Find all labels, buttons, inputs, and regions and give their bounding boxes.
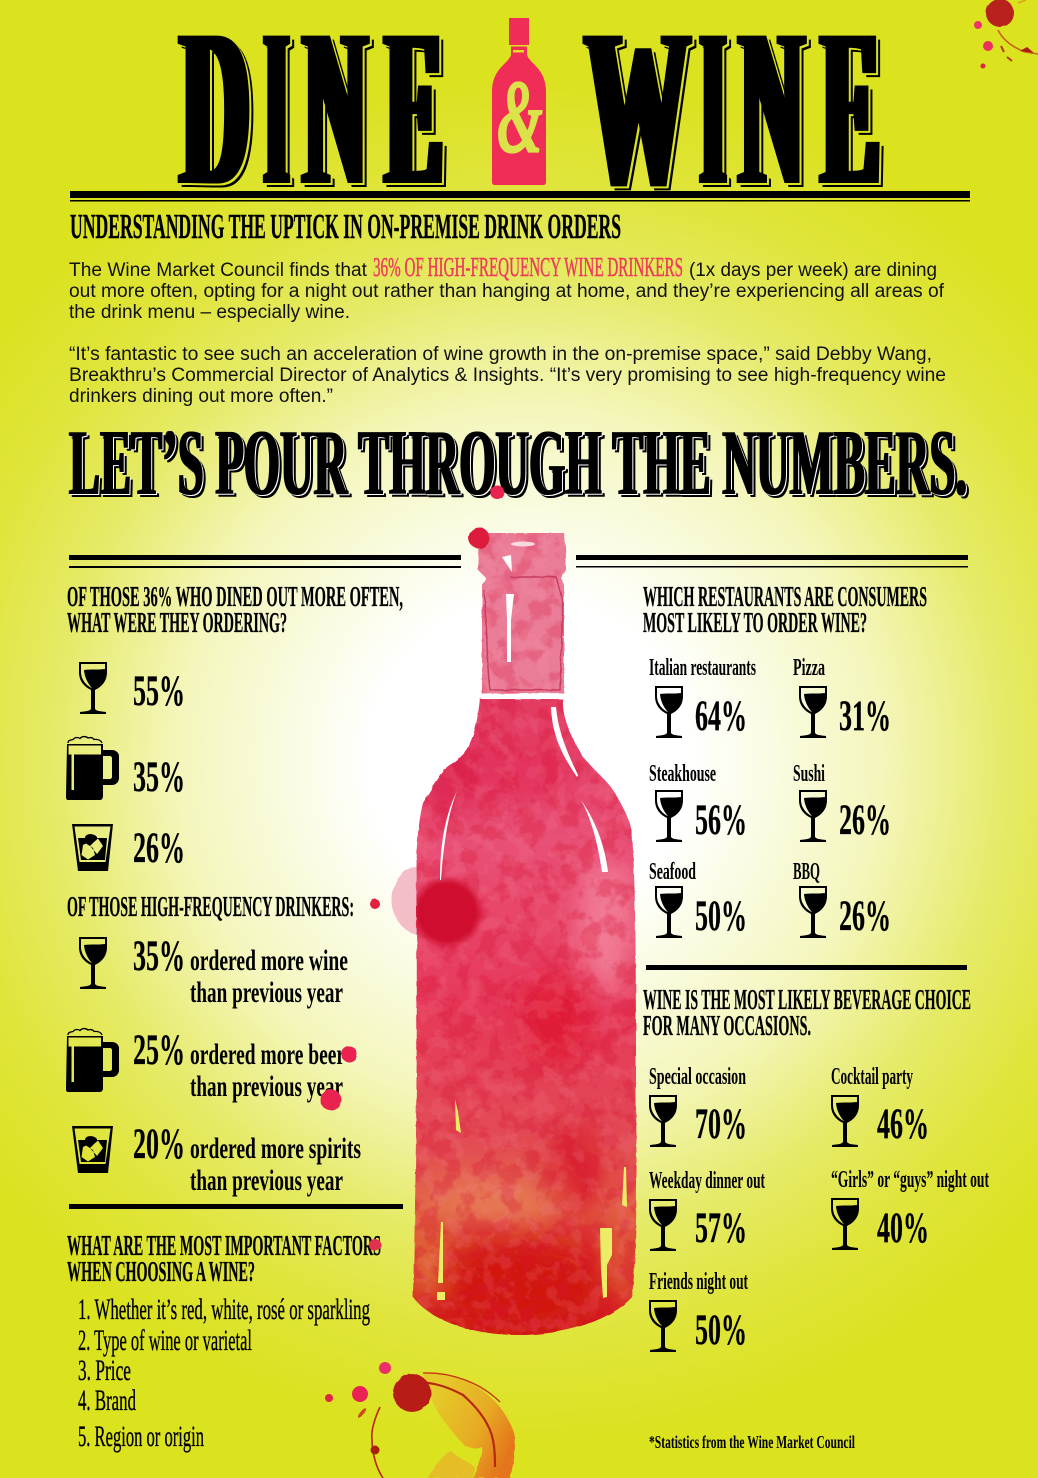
stat: Italian restaurants: Italian restaurants bbox=[649, 655, 756, 681]
quote paragraph bbox=[69, 344, 946, 407]
stat: Weekday dinner out: 57% bbox=[695, 1205, 747, 1252]
stat: Friends night out: 50% bbox=[695, 1307, 747, 1354]
icon: spirits glass bbox=[72, 1126, 113, 1173]
numbered list: 4. Brand bbox=[78, 1384, 136, 1417]
stat: Seafood: 50% bbox=[695, 893, 747, 940]
panel heading bbox=[67, 581, 403, 639]
bottle lower reflections bbox=[437, 1099, 627, 1300]
panel: restaurants bbox=[643, 581, 927, 940]
title: Dine & Wine bbox=[181, 0, 879, 232]
title rules bbox=[70, 191, 970, 202]
panel heading bbox=[67, 1230, 381, 1288]
stat: Weekday dinner out bbox=[649, 1168, 765, 1252]
stat: Girls or guys night out bbox=[831, 1167, 989, 1252]
intro paragraph bbox=[69, 252, 945, 323]
intro paragraph: out more often, opting for a night out rather than hanging at home, and they’re experiencing all areas of bbox=[69, 281, 945, 302]
stat: 35% more wine: 35% bbox=[133, 933, 185, 980]
icon: pink bottle with ampersand: & bbox=[497, 58, 543, 175]
footnote: *Statistics from the Wine Market Council bbox=[649, 1432, 855, 1452]
icon: beer mug bbox=[66, 1029, 119, 1092]
panel heading: FOR MANY OCCASIONS. bbox=[643, 1010, 811, 1042]
stat: Sushi: Sushi bbox=[793, 761, 825, 787]
stat: 35% more wine: than previous year bbox=[190, 976, 343, 1009]
stat: BBQ: BBQ bbox=[793, 859, 820, 885]
text: WHAT ARE THE MOST IMPORTANT FACTORS bbox=[67, 1230, 381, 1262]
stat: BBQ: 26% bbox=[839, 893, 891, 940]
stat: Special occasion bbox=[649, 1064, 747, 1148]
stat: Seafood: Seafood bbox=[649, 859, 696, 885]
panel: choosing factors bbox=[67, 1230, 381, 1453]
text: OF THOSE HIGH-FREQUENCY DRINKERS: bbox=[67, 891, 354, 923]
stat: Special occasion: 70% bbox=[695, 1101, 747, 1148]
stat: Pizza bbox=[793, 655, 891, 740]
watercolor wine bottle bbox=[392, 530, 645, 1340]
quote paragraph: drinkers dining out more often.” bbox=[69, 386, 333, 407]
wine stain: top right bbox=[974, 0, 1038, 68]
top rules bbox=[69, 555, 968, 568]
stat: Steakhouse bbox=[649, 761, 747, 844]
panel: high-frequency drinkers bbox=[66, 891, 361, 1197]
numbered list: 1. Whether it’s red, white, rosé or sparkling bbox=[78, 1293, 370, 1326]
bottle collar and neck bbox=[474, 530, 570, 696]
stat: BBQ bbox=[793, 859, 891, 940]
icon: pink bottle with ampersand bbox=[492, 18, 546, 185]
intro paragraph: 36% OF HIGH-FREQUENCY WINE DRINKERS bbox=[373, 252, 683, 282]
stat: Sushi bbox=[793, 761, 891, 844]
quote paragraph: “It’s fantastic to see such an acceleration of wine growth in the on-premise space,” said Debby Wang, bbox=[69, 344, 932, 365]
stat: spirits 26%: 26% bbox=[133, 825, 185, 872]
stat: Steakhouse: 56% bbox=[695, 797, 747, 844]
stat: 25% more beer: than previous year bbox=[190, 1070, 343, 1103]
stat: wine 55%: 55% bbox=[133, 668, 185, 715]
wine stain: bottom bbox=[325, 1362, 515, 1478]
stat: 25% more beer: ordered more beer bbox=[190, 1038, 345, 1071]
stat: Friends night out: Friends night out bbox=[649, 1269, 748, 1295]
intro paragraph: the drink menu – especially wine. bbox=[69, 302, 350, 323]
stat: 25% more beer: 25% bbox=[133, 1027, 185, 1074]
wine splatter drops bbox=[320, 485, 504, 1251]
numbered list: 2. Type of wine or varietal bbox=[78, 1324, 252, 1357]
stat: Pizza: 31% bbox=[839, 693, 891, 740]
stat: Italian restaurants bbox=[649, 655, 756, 740]
panel heading: WHEN CHOOSING A WINE? bbox=[67, 1256, 255, 1288]
stat: Friends night out bbox=[649, 1269, 748, 1354]
quote paragraph: Breakthru’s Commercial Director of Analytics & Insights. “It’s very promising to see high-frequency wine bbox=[69, 365, 946, 386]
stat: 25% more beer bbox=[133, 1027, 345, 1103]
title word: Dine bbox=[181, 0, 442, 232]
panel heading bbox=[643, 984, 971, 1042]
icon: spirits glass bbox=[72, 824, 113, 871]
icon: beer mug bbox=[66, 737, 119, 800]
text: OF THOSE 36% WHO DINED OUT MORE OFTEN, bbox=[67, 581, 403, 613]
stat: beer 35%: 35% bbox=[133, 754, 185, 801]
stat: Cocktail party: 46% bbox=[877, 1101, 929, 1148]
bottle body bbox=[405, 695, 645, 1340]
stat: 20% more spirits: than previous year bbox=[190, 1164, 343, 1197]
stat: 35% more wine bbox=[133, 933, 348, 1009]
right divider bbox=[646, 965, 967, 970]
numbered list: 5. Region or origin bbox=[78, 1420, 204, 1453]
numbered list bbox=[78, 1293, 370, 1453]
stat: 35% more wine: ordered more wine bbox=[190, 944, 348, 977]
icon: wine glass bbox=[79, 937, 107, 989]
intro paragraph: (1x days per week) are dining bbox=[689, 260, 937, 281]
numbered list: 3. Price bbox=[78, 1354, 131, 1387]
left divider bbox=[69, 1204, 403, 1209]
stat: Pizza: Pizza bbox=[793, 655, 825, 681]
stat: Special occasion: Special occasion bbox=[649, 1064, 746, 1090]
stat: Girls or guys night out: 40% bbox=[877, 1205, 929, 1252]
stat: Cocktail party bbox=[831, 1064, 929, 1148]
stat: Weekday dinner out: Weekday dinner out bbox=[649, 1168, 765, 1194]
bottle highlights bbox=[440, 542, 608, 880]
panel heading: WHAT WERE THEY ORDERING? bbox=[67, 607, 287, 639]
stat: 20% more spirits: ordered more spirits bbox=[190, 1132, 361, 1165]
panel: what were they ordering bbox=[66, 581, 403, 872]
stat: Cocktail party: Cocktail party bbox=[831, 1064, 913, 1090]
panel: occasions bbox=[643, 984, 989, 1354]
bottle stain blob bbox=[392, 866, 440, 936]
stat: Italian restaurants: 64% bbox=[695, 693, 747, 740]
stat: 20% more spirits bbox=[133, 1121, 361, 1197]
stat: 20% more spirits: 20% bbox=[133, 1121, 185, 1168]
icon: wine glass bbox=[79, 662, 107, 714]
stat: Seafood bbox=[649, 859, 747, 940]
intro paragraph: The Wine Market Council finds that bbox=[69, 260, 368, 281]
stat: Sushi: 26% bbox=[839, 797, 891, 844]
panel heading bbox=[643, 581, 927, 639]
stat: Steakhouse: Steakhouse bbox=[649, 761, 716, 787]
